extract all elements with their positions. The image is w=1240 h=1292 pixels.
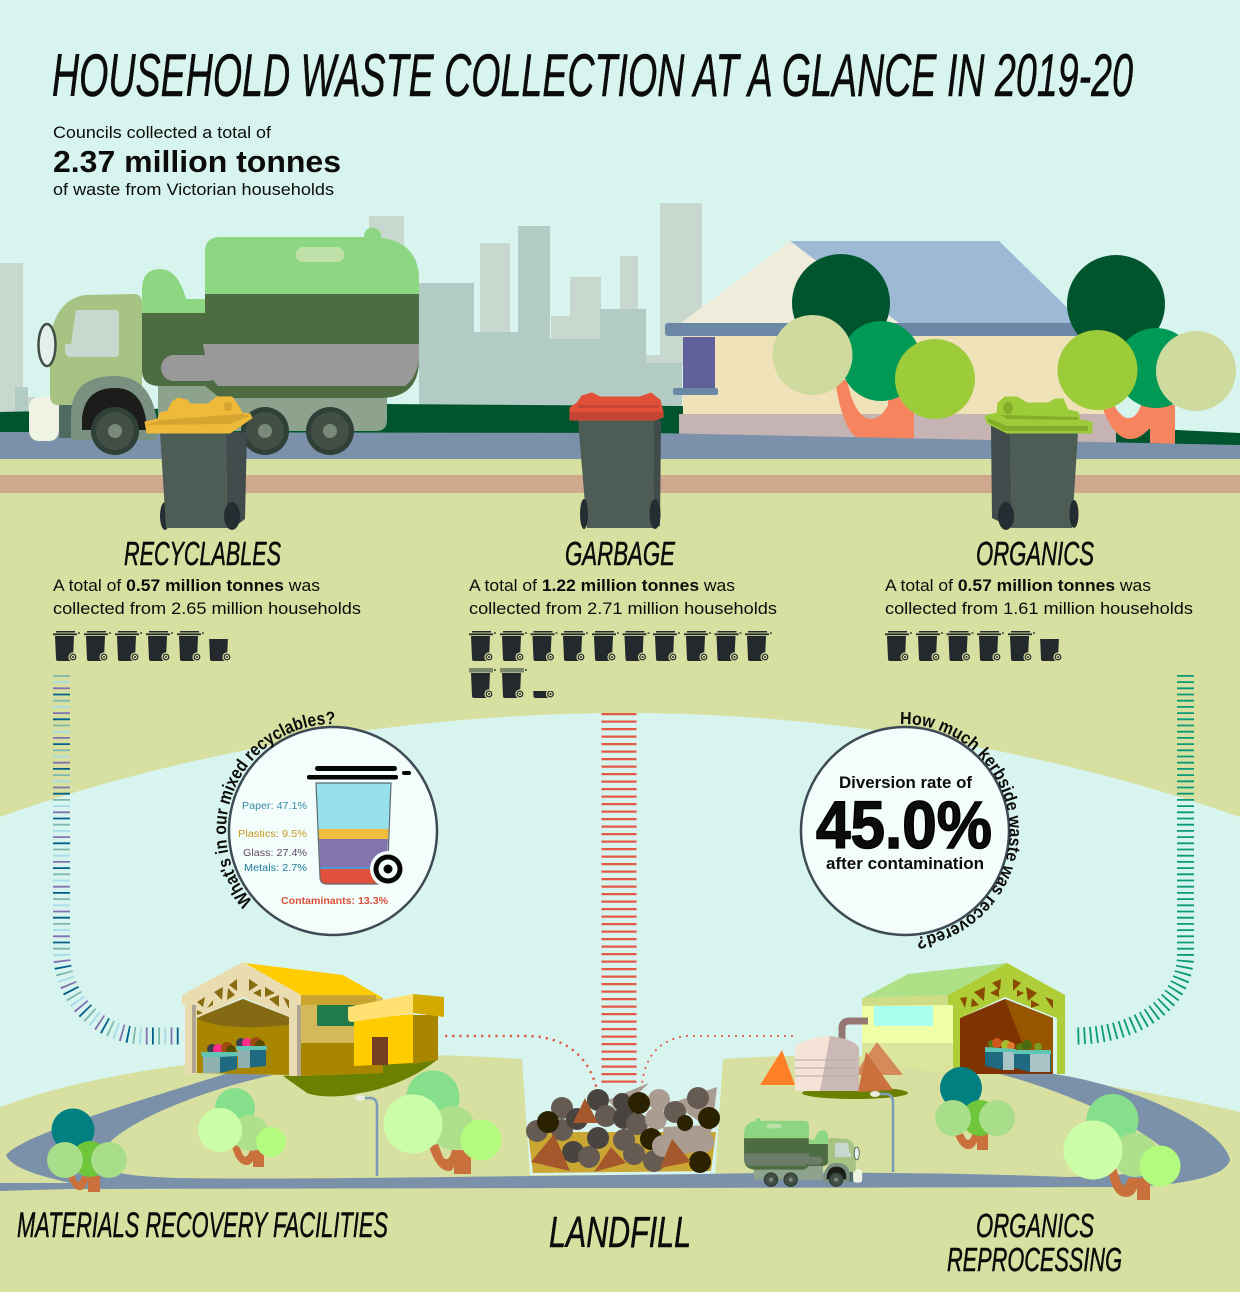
contamination dotted line, right bbox=[642, 1036, 793, 1085]
truss bbox=[197, 979, 289, 1015]
text: diversion rate of: Diversion rate of bbox=[839, 774, 973, 792]
lower ground field bbox=[0, 459, 1240, 817]
tree, right of left facility bbox=[384, 1070, 502, 1174]
label: materials recovery facilities: MATERIALS RECOVERY FACILITIES bbox=[17, 1206, 388, 1245]
compost crates bbox=[985, 1038, 1051, 1072]
lid bbox=[985, 397, 1092, 433]
figure: 45.0% bbox=[816, 788, 992, 863]
callout: what's in mixed recyclables: Metals: 2.7% bbox=[244, 862, 307, 874]
callout: what's in mixed recyclables: Contaminants: 13.3% bbox=[281, 895, 389, 907]
dark green ground bbox=[0, 404, 1240, 460]
pale cone bbox=[854, 1042, 903, 1075]
bin icons bbox=[469, 631, 772, 699]
stat text: A total of 1.22 million tonnes was bbox=[469, 576, 735, 595]
materials recovery facility bbox=[182, 962, 444, 1096]
house bbox=[665, 241, 1116, 444]
garbage stream, striped bbox=[602, 713, 636, 1083]
rocks bbox=[526, 1087, 720, 1173]
organics reprocessing facility bbox=[760, 963, 1065, 1099]
label: organics reprocessing: REPROCESSING bbox=[947, 1241, 1122, 1278]
stat text: A total of 0.57 million tonnes was bbox=[53, 576, 320, 595]
eave bbox=[665, 323, 1082, 336]
organics stream, striped bbox=[1075, 675, 1186, 1036]
heading: recyclables: RECYCLABLES bbox=[124, 535, 281, 572]
landfill pile bbox=[526, 1083, 720, 1173]
truss bbox=[960, 979, 1053, 1009]
waste crates bbox=[201, 1037, 267, 1073]
window bbox=[874, 1006, 933, 1026]
roof bbox=[863, 963, 1007, 998]
panel: garbage: collected from 2.71 million households bbox=[469, 599, 777, 618]
curved heading: How much kerbside waste was recovered? bbox=[900, 712, 1020, 949]
side window bbox=[317, 1005, 355, 1026]
panel: recyclables bbox=[53, 535, 361, 662]
pit bbox=[528, 1132, 716, 1173]
heading: garbage: GARBAGE bbox=[565, 535, 676, 572]
collection truck bbox=[29, 228, 419, 455]
panel: garbage bbox=[469, 535, 777, 699]
brown rubble bbox=[531, 1098, 691, 1172]
wall bbox=[683, 336, 1116, 416]
recycling stream, striped bbox=[62, 675, 180, 1036]
nature strip bbox=[0, 475, 1240, 493]
brown cone bbox=[858, 1052, 893, 1092]
label: organics reprocessing bbox=[947, 1207, 1122, 1278]
label: landfill: LANDFILL bbox=[549, 1208, 691, 1257]
panel: organics: collected from 1.61 million households bbox=[885, 599, 1193, 618]
grey rubble bbox=[608, 1083, 717, 1157]
digester tank bbox=[795, 1036, 859, 1091]
label: organics reprocessing: ORGANICS bbox=[976, 1207, 1094, 1244]
annex bbox=[413, 1015, 438, 1064]
tree, under organics shed bbox=[935, 1067, 1015, 1150]
roof bbox=[790, 241, 1085, 325]
stat text: A total of 0.57 million tonnes was bbox=[885, 576, 1151, 595]
shed frame bbox=[182, 962, 301, 1076]
shed frame bbox=[948, 963, 1065, 1074]
street road bbox=[0, 432, 1240, 460]
tree by the house, left bbox=[772, 254, 975, 439]
intro statement: 2.37 million tonnes bbox=[53, 144, 341, 179]
tree by the house, right bbox=[1058, 255, 1236, 444]
door step bbox=[673, 388, 718, 395]
olive ground bbox=[283, 1059, 438, 1096]
small truck bbox=[744, 1118, 862, 1187]
callout: diversion rate bbox=[800, 712, 1020, 949]
green organics bin bbox=[985, 397, 1092, 530]
intro statement bbox=[53, 123, 341, 199]
plinth bbox=[679, 414, 1116, 444]
side wall bbox=[301, 995, 383, 1076]
chart labels: Paper: 47.1% bbox=[242, 800, 307, 812]
gable bbox=[681, 241, 899, 323]
bottom hills bbox=[0, 1054, 1240, 1292]
curved heading: What's in our mixed recyclables? bbox=[214, 712, 334, 910]
street lamp, right bbox=[870, 1091, 893, 1172]
orange cone bbox=[760, 1050, 795, 1085]
callout: what's in mixed recyclables bbox=[214, 712, 438, 936]
callout: what's in mixed recyclables: Glass: 27.4% bbox=[243, 847, 307, 859]
text: after contamination: after contamination bbox=[826, 855, 984, 873]
tree, left middle bbox=[198, 1088, 286, 1167]
street lamp, left bbox=[355, 1095, 377, 1176]
bin icons bbox=[53, 631, 234, 662]
shed interior bbox=[960, 999, 1053, 1074]
bin icons bbox=[885, 631, 1065, 662]
side wall bbox=[862, 1005, 953, 1074]
intro statement: Councils collected a total of bbox=[53, 123, 271, 142]
circle bbox=[801, 727, 1009, 935]
panel: organics bbox=[885, 535, 1193, 662]
panel: recyclables: collected from 2.65 million households bbox=[53, 599, 361, 618]
winding road bbox=[0, 1073, 1230, 1191]
tank pipe bbox=[842, 1021, 868, 1042]
red garbage bin bbox=[570, 393, 663, 529]
city skyline bbox=[0, 203, 702, 413]
door bbox=[683, 337, 715, 388]
contamination dotted line, left bbox=[445, 1036, 597, 1090]
bin composition chart bbox=[307, 766, 411, 887]
tree, far right bbox=[1064, 1094, 1180, 1200]
circle bbox=[229, 727, 437, 935]
tree, far left bbox=[47, 1108, 127, 1192]
olive ground bbox=[802, 1087, 908, 1099]
lid bbox=[145, 397, 252, 433]
heading: organics: ORGANICS bbox=[976, 535, 1094, 572]
callout: what's in mixed recyclables: Plastics: 9.5% bbox=[238, 828, 307, 840]
shed interior bbox=[196, 999, 289, 1075]
intro statement: of waste from Victorian households bbox=[53, 180, 334, 199]
main roof bbox=[245, 963, 383, 998]
yellow recycling bin bbox=[145, 397, 252, 530]
